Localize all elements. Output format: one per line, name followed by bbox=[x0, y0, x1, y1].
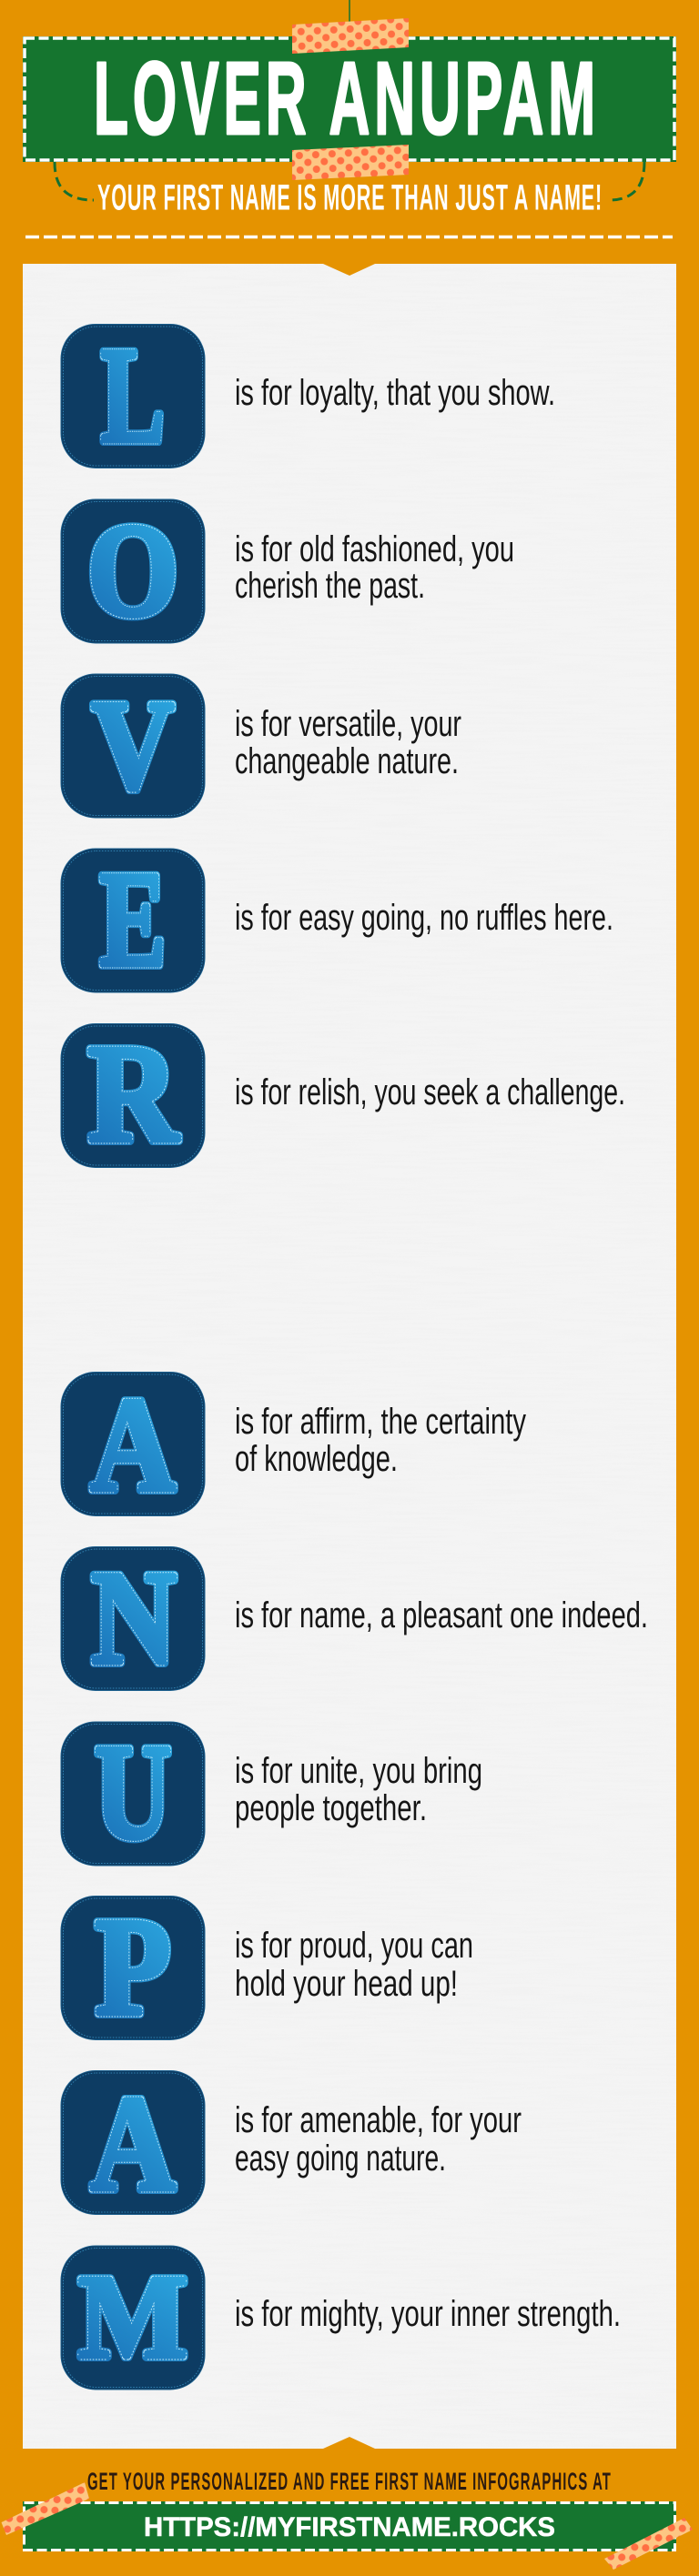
text: U bbox=[235, 1751, 482, 1828]
icon: letter V: V bbox=[92, 675, 174, 816]
icon: letter A: A bbox=[91, 2068, 175, 2219]
header bbox=[23, 0, 676, 236]
row: U bbox=[61, 1717, 482, 1867]
icon: letter U: U bbox=[95, 1717, 171, 1867]
icon: letter M: M bbox=[78, 2251, 187, 2383]
text: A: is for amenable, for your bbox=[235, 2100, 522, 2140]
row: P bbox=[61, 1890, 473, 2045]
title banner bbox=[23, 36, 676, 162]
lower tape bbox=[292, 145, 409, 180]
bottom notch bbox=[323, 2437, 375, 2449]
icon: letter O: O bbox=[87, 497, 178, 644]
icon: letter O: O bbox=[87, 497, 178, 644]
icon: letter P bbox=[61, 1890, 205, 2045]
text: P bbox=[235, 1926, 473, 2004]
icon: letter U bbox=[61, 1717, 205, 1867]
icon: letter P: P bbox=[95, 1890, 171, 2045]
text: O: cherish the past. bbox=[235, 566, 425, 606]
icon: letter P: P bbox=[95, 1890, 171, 2045]
row: M bbox=[61, 2246, 621, 2390]
icon: letter A bbox=[61, 2068, 205, 2219]
icon: letter L: L bbox=[101, 320, 165, 471]
icon: letter R: R bbox=[87, 1017, 179, 1172]
row: N bbox=[61, 1544, 648, 1692]
text: P: hold your head up! bbox=[235, 1964, 458, 2004]
icon: letter U: U bbox=[95, 1717, 171, 1867]
footer url: HTTPS://MYFIRSTNAME.ROCKS bbox=[144, 2512, 555, 2542]
icon: letter N: N bbox=[91, 1544, 177, 1692]
text: U: people together. bbox=[235, 1788, 427, 1828]
icon: letter L: L bbox=[101, 320, 165, 471]
text: V bbox=[235, 704, 461, 781]
row: E bbox=[61, 844, 613, 995]
icon: letter A: A bbox=[91, 1371, 175, 1520]
text: A: of knowledge. bbox=[235, 1439, 398, 1479]
text: A: easy going nature. bbox=[235, 2138, 446, 2179]
icon: letter E: E bbox=[100, 844, 166, 995]
icon: letter O: O bbox=[87, 497, 178, 644]
top notch bbox=[323, 264, 375, 276]
row: A (second) bbox=[61, 2068, 522, 2219]
icon: letter N: N bbox=[91, 1544, 177, 1692]
icon: letter V bbox=[61, 674, 205, 818]
icon: letter A: A bbox=[91, 1371, 175, 1520]
dashed divider line bbox=[25, 236, 673, 238]
left bracket bbox=[55, 162, 94, 200]
icon: letter R: R bbox=[87, 1017, 179, 1172]
text: P: is for proud, you can bbox=[235, 1926, 473, 1966]
icon: letter E: E bbox=[100, 844, 166, 995]
text: L: is for loyalty, that you show. bbox=[235, 373, 555, 413]
row: V bbox=[61, 674, 461, 818]
left tape bbox=[2, 2482, 89, 2535]
footer bbox=[2, 2468, 693, 2570]
text: O: is for old fashioned, you bbox=[235, 529, 514, 569]
icon: letter U: U bbox=[95, 1717, 171, 1867]
icon: letter L bbox=[61, 320, 205, 471]
text: A bbox=[235, 1402, 526, 1479]
right bracket bbox=[609, 162, 644, 200]
hanging string bbox=[349, 0, 350, 24]
footer banner bbox=[23, 2501, 676, 2551]
icon: letter M: M bbox=[78, 2251, 187, 2383]
row: A (first) bbox=[61, 1371, 526, 1520]
row: O bbox=[61, 497, 514, 644]
icon: letter N: N bbox=[91, 1544, 177, 1692]
icon: letter A bbox=[61, 1371, 205, 1520]
icon: letter N bbox=[61, 1544, 205, 1692]
icon: letter E: E bbox=[100, 844, 166, 995]
panel: paper background bbox=[23, 264, 676, 2449]
text: A bbox=[235, 2100, 522, 2179]
icon: letter M: M bbox=[78, 2251, 187, 2383]
icon: letter V: V bbox=[92, 675, 174, 816]
icon: letter L: L bbox=[101, 320, 165, 471]
text: V: is for versatile, your bbox=[235, 704, 461, 744]
icon: letter V: V bbox=[92, 675, 174, 816]
icon: letter A: A bbox=[91, 1371, 175, 1520]
right tape bbox=[604, 2518, 693, 2570]
text: O bbox=[235, 529, 514, 606]
text: V: changeable nature. bbox=[235, 741, 459, 781]
text: U: is for unite, you bring bbox=[235, 1751, 482, 1791]
text: A: is for affirm, the certainty bbox=[235, 1402, 526, 1442]
icon: letter A: A bbox=[91, 2068, 175, 2219]
icon: letter R: R bbox=[87, 1017, 179, 1172]
top tape bbox=[292, 18, 409, 54]
icon: letter P: P bbox=[95, 1890, 171, 2045]
icon: letter E bbox=[61, 844, 205, 995]
row: L bbox=[61, 320, 555, 471]
row: R bbox=[61, 1017, 625, 1172]
icon: letter A: A bbox=[91, 2068, 175, 2219]
